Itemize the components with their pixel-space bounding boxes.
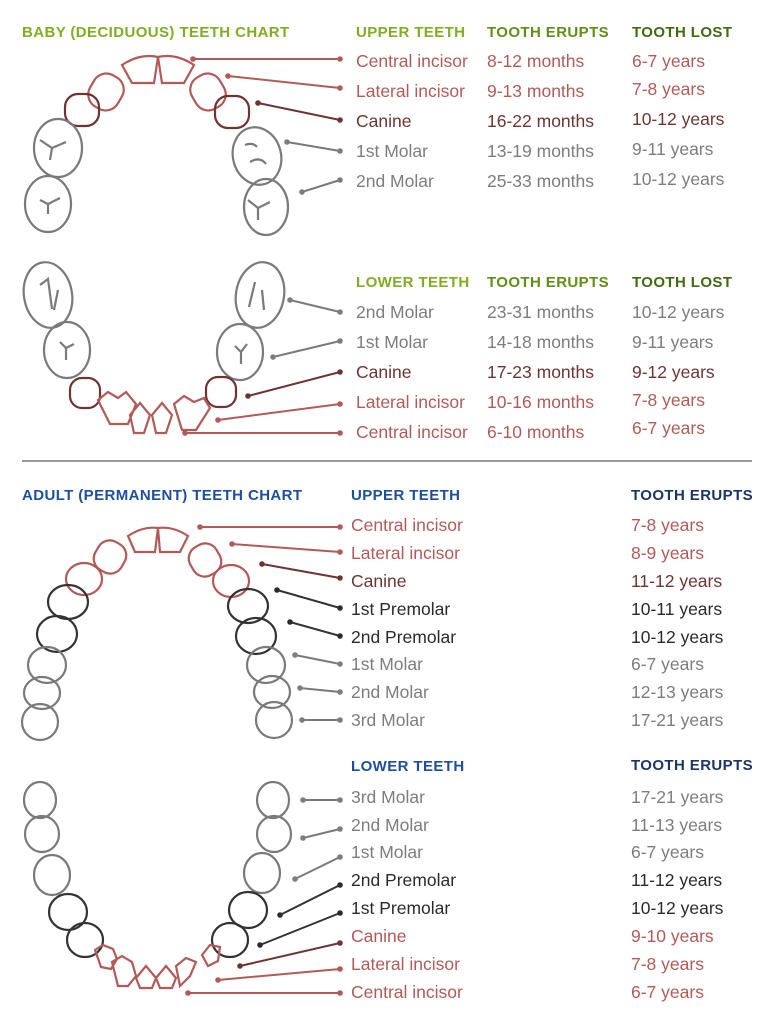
panel: adult lower table: 1st Molar [351,842,423,862]
panel: adult lower table: 7-8 years [631,954,704,974]
diagram: baby lower teeth [19,258,289,433]
panel: baby upper table: TOOTH ERUPTS [487,24,609,41]
panel: adult upper table: 11-12 years [631,571,722,591]
panel: baby upper table: 7-8 years [632,79,705,99]
diagram: adult lower teeth [24,782,291,988]
panel: baby lower table: 23-31 months [487,302,594,322]
panel: baby upper table: 9-11 years [632,139,714,159]
panel: adult lower table: Central incisor [351,982,463,1002]
panel: baby lower table: TOOTH LOST [632,274,732,291]
panel: adult lower table: 10-12 years [631,898,724,918]
panel: baby upper table: 25-33 months [487,171,594,191]
panel: baby upper table: 16-22 months [487,111,594,131]
panel: baby upper table: 8-12 months [487,51,585,71]
panel: baby upper table: TOOTH LOST [632,24,732,41]
panel: baby lower table: 6-10 months [487,422,585,442]
panel: adult lower table: 11-13 years [631,815,722,835]
panel: adult upper table: 10-12 years [631,627,724,647]
panel: baby lower table: Central incisor [356,422,468,442]
panel: adult upper table: 1st Molar [351,654,423,674]
panel: adult lower table: 6-7 years [631,982,704,1002]
panel: adult upper table: 1st Premolar [351,599,450,619]
panel: adult upper table: Central incisor [351,515,463,535]
panel: baby lower table: 10-12 years [632,302,725,322]
connectors: baby lower [182,297,343,436]
panel: baby upper table [356,24,732,191]
panel: baby lower table: 17-23 months [487,362,594,382]
panel: baby upper table: 1st Molar [356,141,428,161]
panel: adult lower table: TOOTH ERUPTS [631,757,753,774]
panel: baby lower table: 1st Molar [356,332,428,352]
panel: baby lower table: Lateral incisor [356,392,465,412]
panel: adult upper table: 3rd Molar [351,710,425,730]
panel: adult upper table: TOOTH ERUPTS [631,487,753,504]
panel: baby lower table: LOWER TEETH [356,274,470,291]
panel: adult upper table: 10-11 years [631,599,722,619]
title: baby chart: BABY (DECIDUOUS) TEETH CHART [22,24,290,41]
panel: adult upper table: 2nd Molar [351,682,429,702]
panel: adult lower table: 17-21 years [631,787,724,807]
connectors: adult lower [185,797,343,996]
panel: adult upper table: 12-13 years [631,682,724,702]
panel: baby lower table: Canine [356,362,411,382]
panel: adult lower table [351,757,753,1002]
panel: adult upper table: 2nd Premolar [351,627,456,647]
panel: baby lower table: TOOTH ERUPTS [487,274,609,291]
panel: adult upper table: Canine [351,571,406,591]
panel: baby upper table: 10-12 years [632,169,725,189]
panel: adult lower table: 11-12 years [631,870,722,890]
panel: baby lower table: 14-18 months [487,332,594,352]
panel: baby upper table: Lateral incisor [356,81,465,101]
panel: baby lower table: 2nd Molar [356,302,434,322]
panel: adult lower table: 3rd Molar [351,787,425,807]
panel: baby lower table: 6-7 years [632,418,705,438]
panel: adult upper table [351,487,753,730]
panel: adult upper table: Lateral incisor [351,543,460,563]
panel: adult upper table: 7-8 years [631,515,704,535]
panel: baby lower table: 9-11 years [632,332,714,352]
panel: adult lower table: Lateral incisor [351,954,460,974]
panel: adult upper table: 6-7 years [631,654,704,674]
panel: adult lower table: 6-7 years [631,842,704,862]
panel: adult upper table: 8-9 years [631,543,704,563]
title: adult chart: ADULT (PERMANENT) TEETH CHART [22,487,302,504]
panel: baby lower table [356,274,732,442]
panel: adult upper table: UPPER TEETH [351,487,460,504]
connectors: adult upper [197,524,343,723]
panel: baby lower table: 10-16 months [487,392,594,412]
panel: baby upper table: 13-19 months [487,141,594,161]
panel: adult lower table: 2nd Molar [351,815,429,835]
diagram: adult upper teeth [22,528,292,740]
panel: baby upper table: Central incisor [356,51,468,71]
panel: baby upper table: 10-12 years [632,109,725,129]
panel: baby lower table: 9-12 years [632,362,715,382]
panel: adult lower table: 1st Premolar [351,898,450,918]
panel: adult lower table: LOWER TEETH [351,758,465,775]
panel: adult lower table: 9-10 years [631,926,714,946]
diagram: baby upper teeth [25,56,288,235]
panel: baby lower table: 7-8 years [632,390,705,410]
panel: adult lower table: Canine [351,926,406,946]
panel: baby upper table: Canine [356,111,411,131]
panel: adult lower table: 2nd Premolar [351,870,456,890]
connectors: baby upper [190,56,343,195]
panel: baby upper table: 9-13 months [487,81,585,101]
panel: baby upper table: 2nd Molar [356,171,434,191]
panel: adult upper table: 17-21 years [631,710,724,730]
panel: baby upper table: UPPER TEETH [356,24,465,41]
panel: baby upper table: 6-7 years [632,51,705,71]
